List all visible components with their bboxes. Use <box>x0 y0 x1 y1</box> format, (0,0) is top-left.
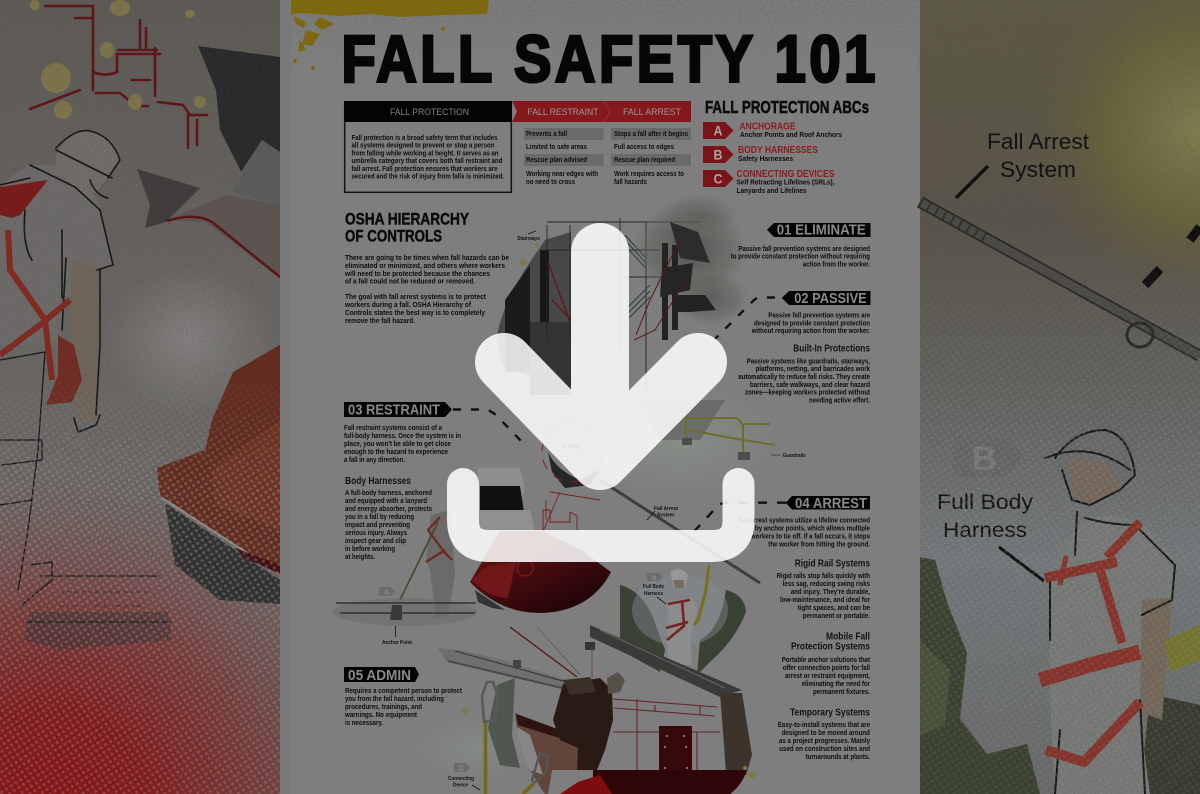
stairways label <box>517 231 540 242</box>
cityscape sketch <box>30 6 207 148</box>
panel: OSHA hierarchy of controls <box>344 210 509 325</box>
green bushes <box>620 585 665 672</box>
badge A <box>703 122 734 139</box>
scaffold sketch <box>547 218 700 390</box>
panel: 04 arrest: workers to tie off. If a fall occurs, it stops <box>750 534 870 541</box>
full body harness label: Full Body <box>937 490 1033 514</box>
panel: fall restraint column: Limited to safe areas <box>526 144 587 151</box>
panel: poster <box>280 0 920 794</box>
panel: OSHA hierarchy of controls: There are going to be times when fall hazards can be <box>345 255 509 262</box>
lifeline rope <box>920 202 1200 356</box>
title: FALL SAFETY 101 <box>342 22 875 96</box>
panel: 04 arrest: permanent fixtures. <box>813 689 870 696</box>
connecting device label <box>448 776 480 790</box>
tag B: B <box>972 440 997 478</box>
panel: 05 admin: Requires a competent person to protect <box>345 688 463 695</box>
panel: OSHA hierarchy of controls: will need to be protected because the chances <box>344 271 490 278</box>
panel: 03 restraint: and equipped with a lanyard <box>345 498 427 505</box>
panel: 04 arrest: tight spaces, and can be <box>798 605 870 612</box>
red plate <box>659 726 692 794</box>
red scaffold lines <box>613 699 720 770</box>
stairways label: Stairways <box>517 236 540 242</box>
panel: 04 arrest: arrest or restraint equipment, <box>785 673 870 680</box>
fall arrest system label: Fall Arrest <box>987 129 1089 154</box>
panel: fall protection definition: FALL PROTECTION <box>390 107 469 117</box>
panel: 03 restraint: inspect gear and clip <box>345 538 406 545</box>
panel: 01 eliminate: Passive fall prevention systems are designed <box>738 246 870 253</box>
red wedge <box>515 713 587 794</box>
badge B: B <box>714 148 723 162</box>
fall arrest system label: System <box>1000 157 1076 182</box>
illustration: scaffolding circle <box>497 193 750 395</box>
panel: 04 arrest: by anchor points, which allows multiple <box>755 526 870 533</box>
yellow grunge top <box>291 0 489 70</box>
full body harness label: Harness <box>943 518 1027 542</box>
red blotch torso <box>157 345 280 604</box>
photo wedge <box>497 232 571 392</box>
worker leaning <box>553 678 613 770</box>
panel: 05 admin: is necessary. <box>345 720 383 727</box>
panel: 02 passive: without requiring action from the worker. <box>751 328 870 335</box>
illustration: tied-off worker with harness <box>333 510 752 775</box>
panel: 01 eliminate: to provide constant protection without requiring <box>731 254 870 261</box>
panel: 02 passive: barriers, safe walkways, and clear hazard <box>750 382 870 389</box>
connecting device label: Connecting <box>448 776 474 782</box>
panel: 03 restraint: a fall in any direction. <box>344 457 405 464</box>
panel: fall protection ABCs: ANCHORAGE <box>740 120 796 132</box>
badge C: C <box>714 172 723 186</box>
full body harness label: Full Body <box>643 584 664 590</box>
panel: 03 restraint: place, you won't be able to get close <box>344 441 451 448</box>
panel: fall arrest column: FALL ARREST <box>623 107 681 118</box>
lifeline <box>600 480 760 583</box>
illustration: connecting device and beam <box>415 627 756 794</box>
full body harness label <box>643 584 666 604</box>
fall arrest system label: System <box>657 512 674 518</box>
heading: ABCs: FALL PROTECTION ABCs <box>705 97 869 117</box>
panel: 02 passive: Passive fall prevention systems are <box>768 313 870 320</box>
tag: 02 passive: 02 PASSIVE <box>794 291 867 307</box>
body harness worker left <box>333 510 477 646</box>
red segment <box>470 531 611 613</box>
panel: 03 restraint <box>344 402 523 561</box>
splatter <box>743 766 756 778</box>
badge C <box>703 170 734 187</box>
panel: fall protection ABCs: Anchor Points and Roof Anchors <box>740 132 842 139</box>
heading: built-in protections: Built-In Protections <box>793 344 870 355</box>
paint splatter <box>30 0 206 119</box>
panel: OSHA hierarchy of controls: Controls states the best way is to completely <box>345 310 485 317</box>
panel: 03 restraint: you in a fall by reducing <box>345 514 414 521</box>
panel: OSHA hierarchy of controls: The goal with fall arrest systems is to protect <box>345 294 487 301</box>
panel: 04 arrest: used on construction sites and <box>779 746 870 753</box>
panel: 03 restraint: enough to the hazard to experience <box>344 449 448 456</box>
fall arrest system label <box>647 506 678 520</box>
badge B <box>703 146 734 163</box>
heading: OSHA: OSHA HIERARCHY <box>345 210 469 228</box>
tag C <box>454 763 470 772</box>
heading: body harnesses: Body Harnesses <box>345 476 411 487</box>
panel: 04 arrest: as a project progresses. Mainly <box>779 738 870 745</box>
panel: 04 arrest: less sag, reducing swing risks <box>783 581 870 588</box>
panel: 04 arrest: Fall arrest systems utilize a lifeline connected <box>738 518 870 525</box>
tag A: A <box>384 590 389 596</box>
panel: 05 admin: warnings. No equipment <box>344 712 418 719</box>
panel: 01 eliminate <box>731 222 870 268</box>
panel: 04 arrest <box>688 496 871 761</box>
panel: fall arrest column <box>604 101 691 186</box>
anchor point label: Anchor Point <box>382 640 412 646</box>
panel: 03 restraint: impact and preventing <box>345 522 410 529</box>
halftone overlay <box>0 388 280 794</box>
panel: OSHA hierarchy of controls: OF CONTROLS <box>345 228 442 246</box>
carabiner and lanyard <box>482 682 498 794</box>
panel: left illustration background <box>0 0 280 794</box>
panel: 03 restraint: Fall restraint systems consist of a <box>344 425 442 432</box>
panel: fall restraint column: Working near edges with <box>526 171 598 178</box>
panel: 02 passive: Passive systems like guardrails, stairways, <box>747 358 870 365</box>
panel: 04 arrest: offer connection points for fall <box>783 665 870 672</box>
panel: fall restraint column: FALL RESTRAINT <box>528 107 599 118</box>
panel: 03 restraint: full-body harness. Once the system is in <box>344 433 461 440</box>
panel: 04 arrest: Protection Systems <box>791 642 870 653</box>
dashed leader <box>1145 227 1200 285</box>
panel: OSHA hierarchy of controls: remove the fall hazard. <box>345 318 415 325</box>
panel: 02 passive: platforms, netting, and barricades work <box>756 366 870 373</box>
worker with harness <box>1040 430 1200 794</box>
panel: fall protection definition <box>344 101 512 192</box>
tag: 03 restraint: 03 RESTRAINT <box>348 402 440 418</box>
panel: 04 arrest: designed to be moved around <box>782 730 870 737</box>
panel: 04 arrest: Portable anchor solutions that <box>782 657 871 664</box>
panel: 03 restraint: serious injury. Always <box>345 530 407 537</box>
panel: fall protection ABCs: BODY HARNESSES <box>738 144 818 156</box>
dark ink wash <box>488 678 520 768</box>
harness worker right <box>643 565 709 665</box>
worker sketch <box>0 130 120 605</box>
overhead beam <box>438 648 573 689</box>
panel: OSHA hierarchy of controls: workers during a fall. OSHA Hierarchy of <box>344 302 472 309</box>
panel: fall restraint column: no need to cross <box>526 179 575 186</box>
tag: 04 arrest: 04 ARREST <box>795 496 867 512</box>
d-ring detail <box>548 452 600 488</box>
tag B: B <box>652 575 657 582</box>
panel: 04 arrest: eliminating the need for <box>802 681 870 688</box>
dashed leader <box>688 503 786 538</box>
fall arrest system label <box>956 129 1089 198</box>
ground sketch <box>24 576 172 650</box>
panel: right illustration background <box>920 0 1200 794</box>
panel: fall protection ABCs: Safety Harnesses <box>738 156 793 163</box>
heading: rigid rail systems: Rigid Rail Systems <box>795 559 870 570</box>
panel: 03 restraint: and energy absorber, protects <box>345 506 432 513</box>
panel: 04 arrest: permanent or portable. <box>803 613 870 620</box>
watercolor wash <box>415 718 535 778</box>
fall arrest system label: Fall Arrest <box>654 506 678 512</box>
panel: fall protection ABCs: Self Retracting Lifelines (SRLs), <box>736 180 835 187</box>
tag A <box>379 587 395 596</box>
connecting device label: Device <box>453 782 468 788</box>
panel: OSHA hierarchy of controls: of a fall could not be reduced or removed. <box>345 278 475 286</box>
panel: fall protection definition: fall arrest. Fall protection ensures that workers are <box>352 166 498 173</box>
panel: fall arrest column: Work requires access to <box>614 171 684 178</box>
panel: 03 restraint: in before working <box>345 546 395 553</box>
panel: 03 restraint: A full-body harness, anchored <box>345 490 432 497</box>
full body harness label <box>937 490 1044 581</box>
panel: fall protection definition: umbrella category that covers both fall restraint and <box>352 158 502 165</box>
panel: 04 arrest: the worker from hitting the ground. <box>768 542 870 548</box>
panel: 04 arrest: Easy-to-install systems that are <box>778 722 870 729</box>
panel: 05 admin: you from the fall hazard, including <box>345 696 444 703</box>
panel: 04 arrest: and injury. They're durable, <box>791 589 870 596</box>
ink wash <box>632 198 748 302</box>
panel: fall protection definition: Fall protection is a broad safety term that includes <box>352 135 498 142</box>
tag: 01 eliminate: 01 ELIMINATE <box>777 222 866 238</box>
halftone overlay <box>920 304 1200 794</box>
panel: fall arrest column: fall hazards <box>614 179 647 186</box>
badge A: A <box>714 124 723 138</box>
panel: fall protection ABCs: CONNECTING DEVICES <box>736 168 834 180</box>
guardrails label: Guardrails <box>783 453 806 459</box>
dashed leader <box>715 298 775 339</box>
panel: fall protection definition: from falling while working at height. It serves as an <box>352 151 498 158</box>
anchor point label <box>382 626 412 646</box>
red rays <box>510 627 577 677</box>
full body harness label: Harness <box>644 591 663 597</box>
panel: 04 arrest: turnarounds at plants. <box>806 754 870 761</box>
floor glow <box>593 770 747 794</box>
panel: 02 passive: automatically to reduce fall risks. They create <box>738 374 870 381</box>
panel: fall arrest column: Rescue plan required <box>614 157 675 164</box>
illustration: guardrails <box>585 385 806 495</box>
heading: temporary systems: Temporary Systems <box>790 708 870 719</box>
splatter wash <box>514 215 555 278</box>
panel: 05 admin: procedures, trainings, and <box>345 704 422 711</box>
tag: 05 admin: 05 ADMIN <box>348 668 411 684</box>
panel: 04 arrest: Rigid rails stop falls quickly with <box>777 573 870 580</box>
tag C: C <box>459 766 464 772</box>
dashed leader <box>453 410 523 443</box>
panel: fall arrest column: Full access to edges <box>614 144 674 151</box>
d-ring label: D-Ring <box>563 444 579 450</box>
tag B <box>953 436 1023 478</box>
large figure jacket <box>137 46 280 278</box>
guardrails label <box>771 453 806 459</box>
carabiner bottom <box>532 753 548 783</box>
panel: fall protection definition: all systems designed to prevent or stop a person <box>352 142 494 150</box>
panel: 04 arrest: low-maintenance, and ideal for <box>780 597 870 604</box>
panel: 02 passive: zones—keeping workers protected without <box>745 390 871 396</box>
panel: fall restraint column <box>512 101 610 186</box>
panel: fall restraint column: Rescue plan advised <box>526 157 587 164</box>
panel: 01 eliminate: action from the worker. <box>803 261 870 268</box>
heading: mobile fall protection: Mobile Fall <box>826 632 870 643</box>
panel: 05 admin <box>344 667 463 727</box>
panel: 02 passive <box>715 291 871 404</box>
panel: 03 restraint: at heights. <box>345 554 375 561</box>
panel: fall protection ABCs: Lanyards and Lifelines <box>736 188 807 195</box>
steel beam <box>590 625 742 697</box>
green bushes <box>920 557 1200 794</box>
steel frame <box>634 222 716 340</box>
illustration: restraint worker harness <box>470 422 760 613</box>
panel: fall restraint column: Prevents a fall <box>526 131 567 138</box>
city sketch red <box>525 492 600 570</box>
panel: fall protection definition: secured and the risk of injury from falls is minimized. <box>352 174 504 181</box>
panel: fall arrest column: Stops a fall after it begins <box>614 131 688 138</box>
panel: OSHA hierarchy of controls: eliminated or minimized, and others where workers <box>345 263 505 270</box>
panel: 02 passive: designed to provide constant protection <box>754 320 870 328</box>
panel: 02 passive: needing active effort. <box>809 397 870 404</box>
icon: download arrow overlay <box>463 252 738 546</box>
panel: fall protection ABCs <box>703 97 869 195</box>
